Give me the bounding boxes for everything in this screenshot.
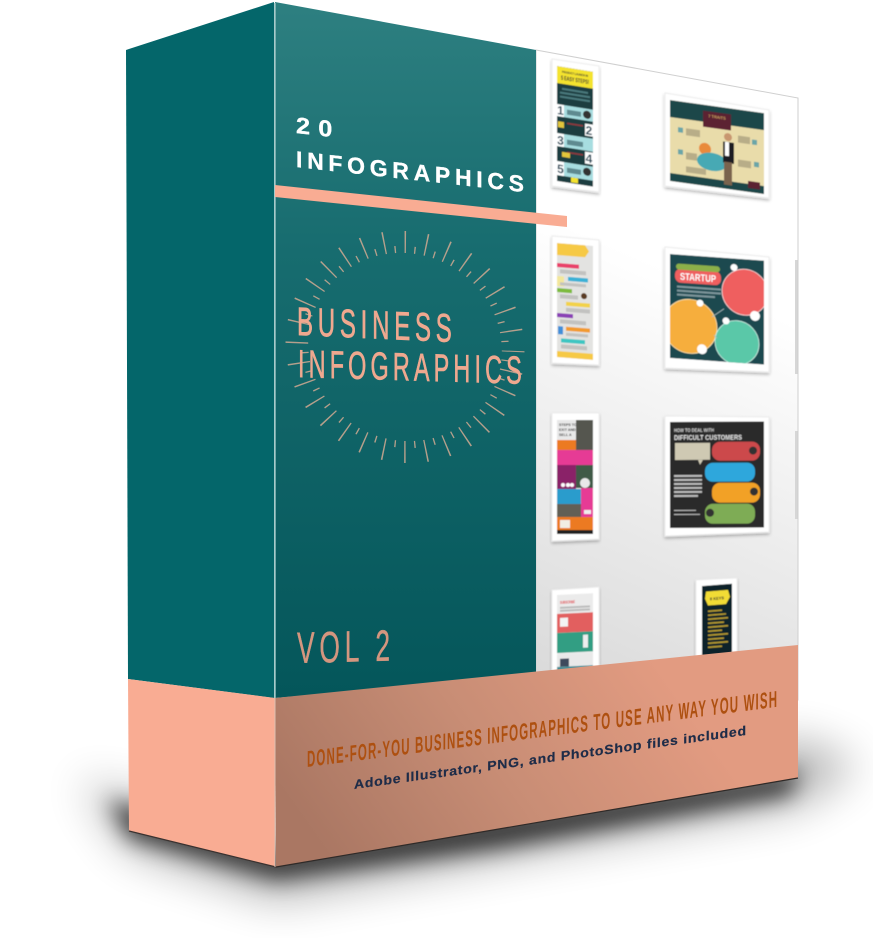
- thumbnail: bottom right dark list: 8 KEYS: [710, 595, 724, 601]
- box front: teal panel: [275, 2, 536, 698]
- sunburst: [297, 238, 513, 456]
- thumbnail: steps to exit and sell a business: [552, 413, 599, 541]
- box left side face: [126, 2, 276, 867]
- thumbnail: product launch in 5 easy steps: PRODUCT LAUNCH IN: [562, 70, 588, 78]
- thumbnail: how to deal with difficult customers: DIFFICULT CUSTOMERS: [674, 435, 742, 442]
- thumbnail: product launch in 5 easy steps: 5 EASY STEPS!: [561, 76, 589, 86]
- thumbnail: product launch in 5 easy steps: [552, 59, 599, 192]
- title: business infographics: INFOGRAPHICS: [298, 342, 522, 392]
- thumbnail: product launch in 5 easy steps: 5: [557, 162, 564, 177]
- heading: 20 infographics: [296, 113, 524, 197]
- salmon bar: [275, 185, 567, 227]
- thumbnail: product launch in 5 easy steps: 1: [557, 103, 564, 118]
- thumbnail: steps to exit and sell a business: SELL A: [559, 433, 572, 437]
- thumbnail: steps to exit and sell a business: STEPS TO: [559, 423, 577, 427]
- thumbnail: bottom left list: SUBSCRIBE: [560, 599, 575, 605]
- edge fragments of hidden thumbnails: [795, 260, 798, 519]
- volume label: VOL 2: [297, 621, 390, 673]
- front salmon band: [275, 645, 798, 867]
- thumbnail: steps to exit and sell a business: EXIT AND: [559, 428, 576, 432]
- thumbnail: startup: STARTUP: [680, 272, 716, 285]
- heading: 20 infographics: 20: [296, 113, 332, 143]
- box front: white infographic panel: [536, 50, 798, 700]
- sub-tagline: Adobe Illustrator, PNG, and PhotoShop files included: [354, 723, 746, 792]
- thumbnail: product launch in 5 easy steps: 4: [586, 151, 593, 166]
- thumbnail: bottom right dark list: [694, 578, 740, 656]
- thumbnail: car and man: 7 TRAITS: [708, 113, 726, 121]
- thumbnail: startup: [663, 247, 769, 372]
- tagline: DONE-FOR-YOU BUSINESS INFOGRAPHICS TO USE ANY WAY YOU WISH: [307, 687, 777, 772]
- thumbnail: product launch in 5 easy steps: 2: [586, 123, 593, 138]
- thumbnail: bottom left list: [552, 587, 599, 690]
- thumbnail: yellow tabs infographic: [552, 236, 599, 365]
- thumbnail: product launch in 5 easy steps: 3: [557, 133, 564, 148]
- title: business infographics: BUSINESS: [297, 299, 452, 350]
- ground shadow: [80, 740, 860, 900]
- title: business infographics: [297, 299, 522, 392]
- heading: 20 infographics: INFOGRAPHICS: [296, 146, 524, 197]
- thumbnail: how to deal with difficult customers: [665, 416, 769, 536]
- thumbnail: car and man: [665, 93, 769, 198]
- thumbnail: how to deal with difficult customers: HOW TO DEAL WITH: [674, 428, 714, 434]
